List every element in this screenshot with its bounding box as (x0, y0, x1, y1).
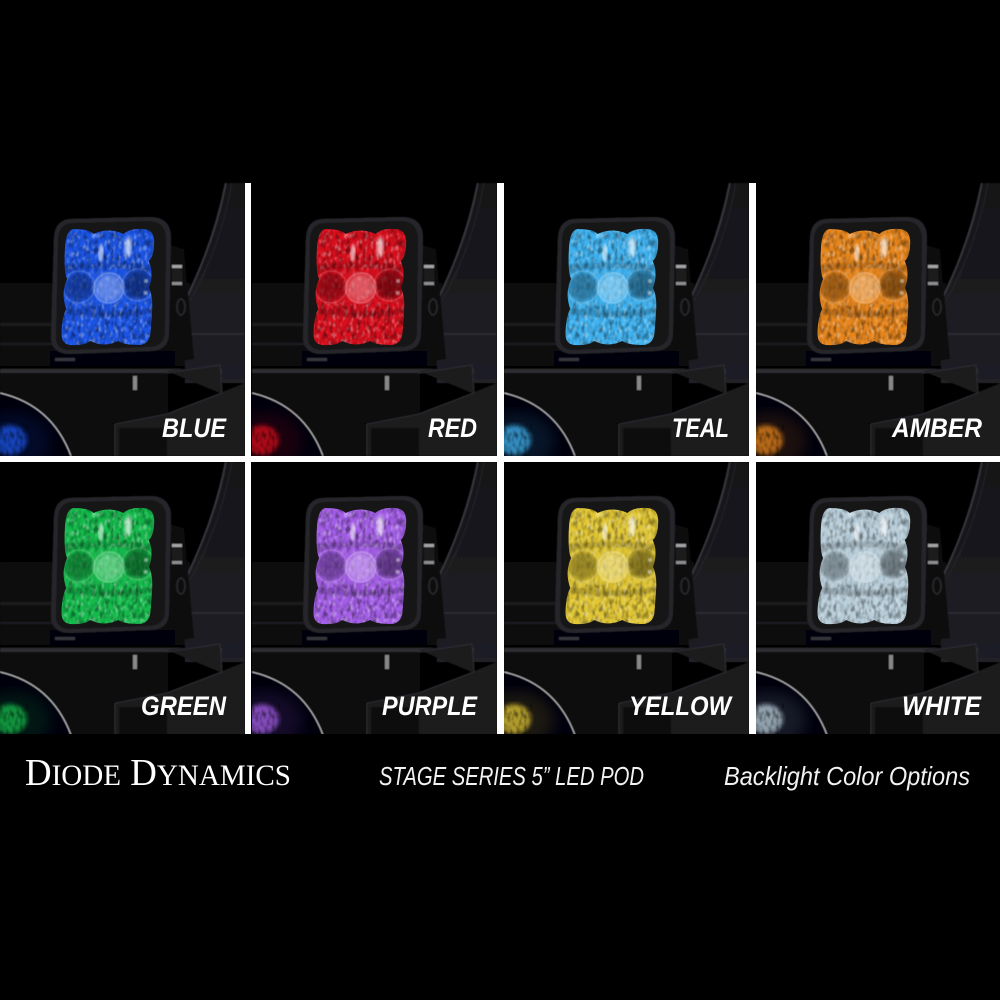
label: blue: BLUE (162, 413, 227, 443)
panel: blue (0, 183, 245, 469)
label: red: RED (428, 413, 477, 443)
label: teal: TEAL (672, 413, 729, 443)
white grid dividers (0, 183, 1000, 734)
product title: STAGE SERIES 5” LED POD (379, 761, 644, 791)
panel: white (734, 462, 1000, 748)
label: white: WHITE (902, 691, 982, 721)
label: amber: AMBER (891, 413, 982, 443)
panel: red (230, 183, 497, 469)
panel: purple (230, 462, 497, 748)
panel: teal (482, 183, 749, 469)
subtitle: Backlight Color Options (724, 761, 970, 791)
panel: yellow (482, 462, 749, 748)
brand logotype: DIODE DYNAMICS (25, 752, 291, 794)
panel: green (0, 462, 245, 748)
label: purple: PURPLE (382, 691, 478, 721)
bottom mask hiding scene overflow (0, 734, 1000, 1000)
label: yellow: YELLOW (629, 691, 733, 721)
label: green: GREEN (141, 691, 226, 721)
panel: amber (734, 183, 1000, 469)
